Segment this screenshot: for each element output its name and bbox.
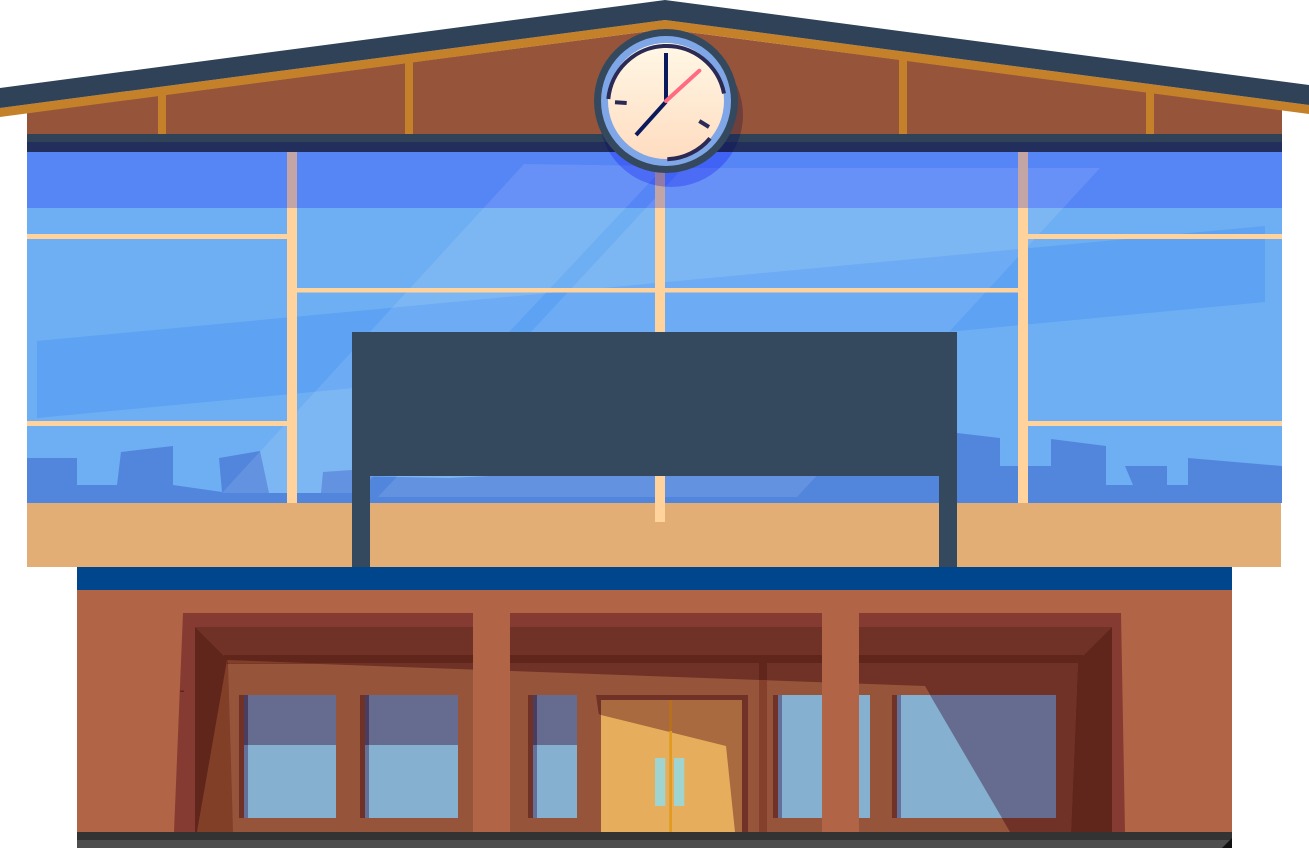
blue lintel xyxy=(77,567,1232,590)
door seam xyxy=(669,700,672,832)
sky tint panel xyxy=(37,226,1265,418)
clock shadow xyxy=(599,43,743,187)
clock ring xyxy=(601,36,731,166)
gable wall xyxy=(27,29,1282,134)
recess ceiling xyxy=(195,627,1112,656)
recess frame xyxy=(174,613,1125,832)
clock arcs and ticks xyxy=(608,46,724,159)
door lit xyxy=(601,715,735,832)
centre mullion lower xyxy=(655,476,665,522)
second hand xyxy=(666,71,699,101)
glass facade xyxy=(27,152,1282,522)
pavement xyxy=(77,832,1232,848)
door xyxy=(596,695,748,832)
left side wall xyxy=(195,627,228,832)
window 2 xyxy=(360,695,458,818)
upper storey xyxy=(0,0,1309,567)
ground storey xyxy=(77,567,1232,848)
reflection left xyxy=(222,164,665,493)
dimmed frame tops xyxy=(287,152,1028,208)
brick wall xyxy=(77,590,1232,832)
door handles xyxy=(655,758,684,806)
glass base xyxy=(27,152,1282,503)
sunlit wall xyxy=(228,664,1010,832)
window 4 xyxy=(773,695,870,818)
window 5 xyxy=(892,695,1056,818)
pillar right xyxy=(822,613,859,832)
sign board xyxy=(352,332,957,567)
small mark xyxy=(180,690,184,692)
glass top band xyxy=(27,152,1282,208)
door shaded xyxy=(601,700,742,832)
right side wall xyxy=(1071,627,1112,832)
left wall light xyxy=(197,660,233,832)
ceiling shadow xyxy=(224,655,1083,664)
wall divider xyxy=(759,663,767,832)
eave band xyxy=(27,134,1282,152)
light wedge xyxy=(227,660,320,664)
window 3 xyxy=(528,695,577,818)
minute hand xyxy=(664,53,668,102)
roof trim xyxy=(0,20,1309,117)
base fascia xyxy=(27,503,1281,567)
window 1 xyxy=(239,695,336,818)
window frames xyxy=(27,208,1282,522)
pillar left xyxy=(473,613,510,832)
back wall xyxy=(228,663,1078,832)
hour hand xyxy=(636,102,666,135)
clock xyxy=(594,29,743,187)
clock rim xyxy=(594,29,738,173)
city skyline xyxy=(27,433,1282,503)
roof xyxy=(0,0,1309,108)
clock face xyxy=(608,43,724,159)
reflection right xyxy=(378,168,1100,497)
door frame xyxy=(596,695,748,832)
gable posts xyxy=(158,58,1154,134)
